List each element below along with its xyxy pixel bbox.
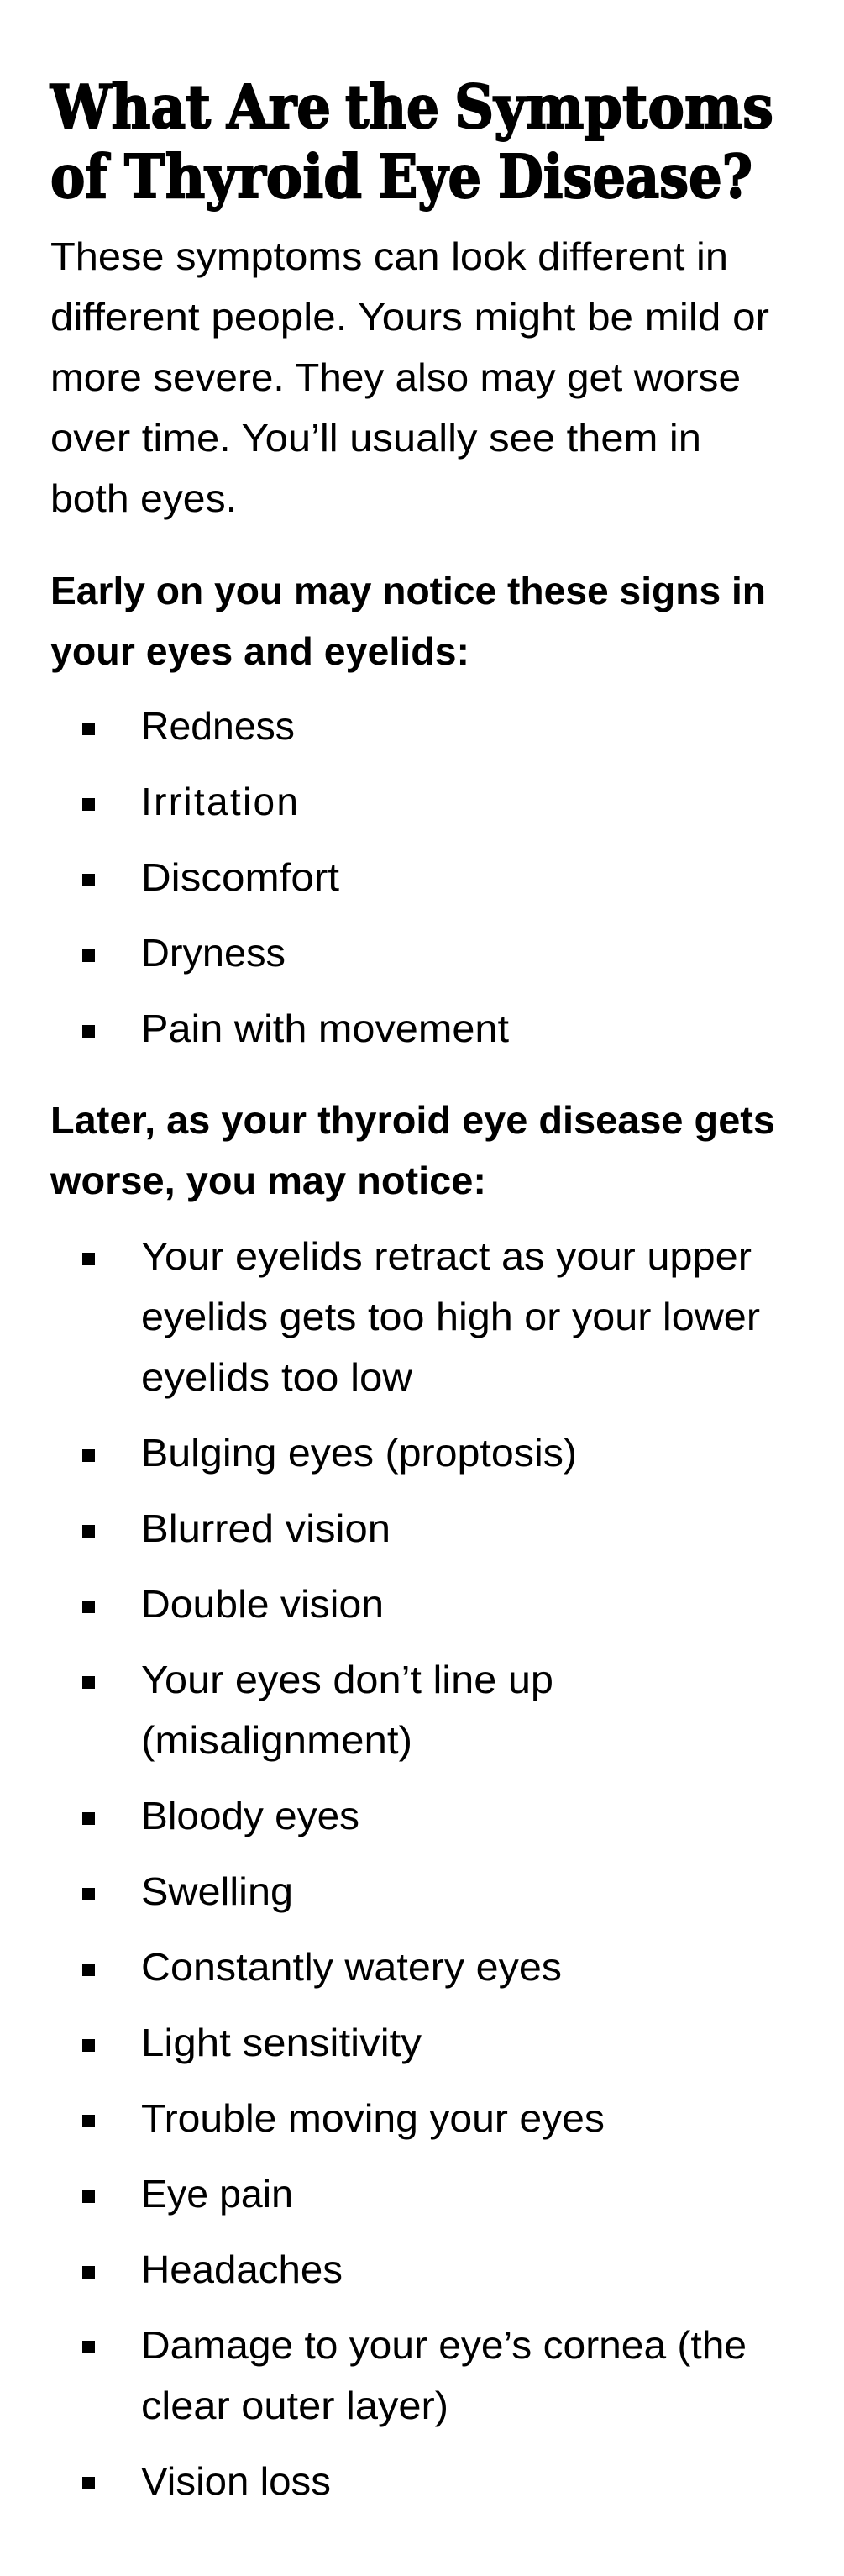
list item: Vision loss: Vision loss — [141, 2459, 331, 2503]
list item: cornea damage: Damage to your eye’s cornea (the — [141, 2323, 747, 2367]
list item: Constantly watery eyes: Constantly watery eyes — [141, 1945, 562, 1989]
list item: Swelling — [82, 1869, 293, 1913]
title: Thyroid — [124, 141, 362, 212]
list item: Swelling: Swelling — [141, 1869, 293, 1913]
list item: cornea damage: clear outer layer) — [141, 2384, 448, 2427]
list item: Irritation: Irritation — [141, 780, 298, 823]
subheading: early signs — [50, 569, 766, 673]
intro paragraph — [50, 234, 769, 520]
list item: Trouble moving your eyes: Trouble moving your eyes — [141, 2096, 605, 2140]
intro paragraph: These symptoms can look different in — [50, 234, 728, 278]
title: Are — [226, 71, 331, 142]
subheading: later signs: Later, as your thyroid eye disease gets — [50, 1098, 775, 1142]
title: the — [345, 71, 439, 142]
list item: Dryness — [82, 931, 286, 975]
list item: Double vision: Double vision — [141, 1582, 384, 1626]
title: Disease? — [498, 141, 752, 212]
list item: eyelid retraction: eyelids gets too high or your lower — [141, 1295, 760, 1338]
list item: misalignment — [82, 1658, 553, 1762]
intro paragraph: more severe. They also may get worse — [50, 355, 741, 399]
list item: Headaches: Headaches — [141, 2247, 343, 2291]
list item: eyelid retraction — [82, 1234, 760, 1399]
list item: misalignment: (misalignment) — [141, 1718, 412, 1762]
list item: Eye pain: Eye pain — [141, 2172, 293, 2216]
list item: Bulging eyes: Bulging eyes (proptosis) — [141, 1431, 577, 1475]
list item: misalignment: Your eyes don’t line up — [141, 1658, 553, 1701]
title: What — [50, 71, 211, 142]
list item: Redness: Redness — [141, 704, 295, 748]
intro paragraph: different people. Yours might be mild or — [50, 295, 769, 339]
subheading: later signs: worse, you may notice: — [50, 1159, 486, 1202]
list: early signs — [82, 704, 509, 1050]
list item: eyelid retraction: eyelids too low — [141, 1355, 413, 1399]
list item: Light sensitivity: Light sensitivity — [141, 2021, 422, 2064]
list item: Discomfort: Discomfort — [141, 855, 339, 899]
title — [50, 71, 773, 212]
title: Symptoms — [454, 71, 773, 142]
list: later signs — [82, 1234, 760, 2503]
subheading: early signs: your eyes and eyelids: — [50, 629, 469, 673]
list item: cornea damage — [82, 2323, 747, 2427]
intro paragraph: over time. You’ll usually see them in — [50, 416, 701, 460]
title: of — [50, 141, 111, 212]
subheading: later signs — [50, 1098, 775, 1202]
list item: Blurred vision: Blurred vision — [141, 1506, 391, 1550]
list item: Dryness: Dryness — [141, 931, 286, 975]
list item: Pain with movement: Pain with movement — [141, 1007, 509, 1050]
subheading: early signs: Early on you may notice these signs in — [50, 569, 766, 612]
title: Eye — [378, 141, 481, 212]
intro paragraph: both eyes. — [50, 476, 237, 520]
list item: Bloody eyes: Bloody eyes — [141, 1794, 359, 1837]
list item: eyelid retraction: Your eyelids retract as your upper — [141, 1234, 752, 1278]
